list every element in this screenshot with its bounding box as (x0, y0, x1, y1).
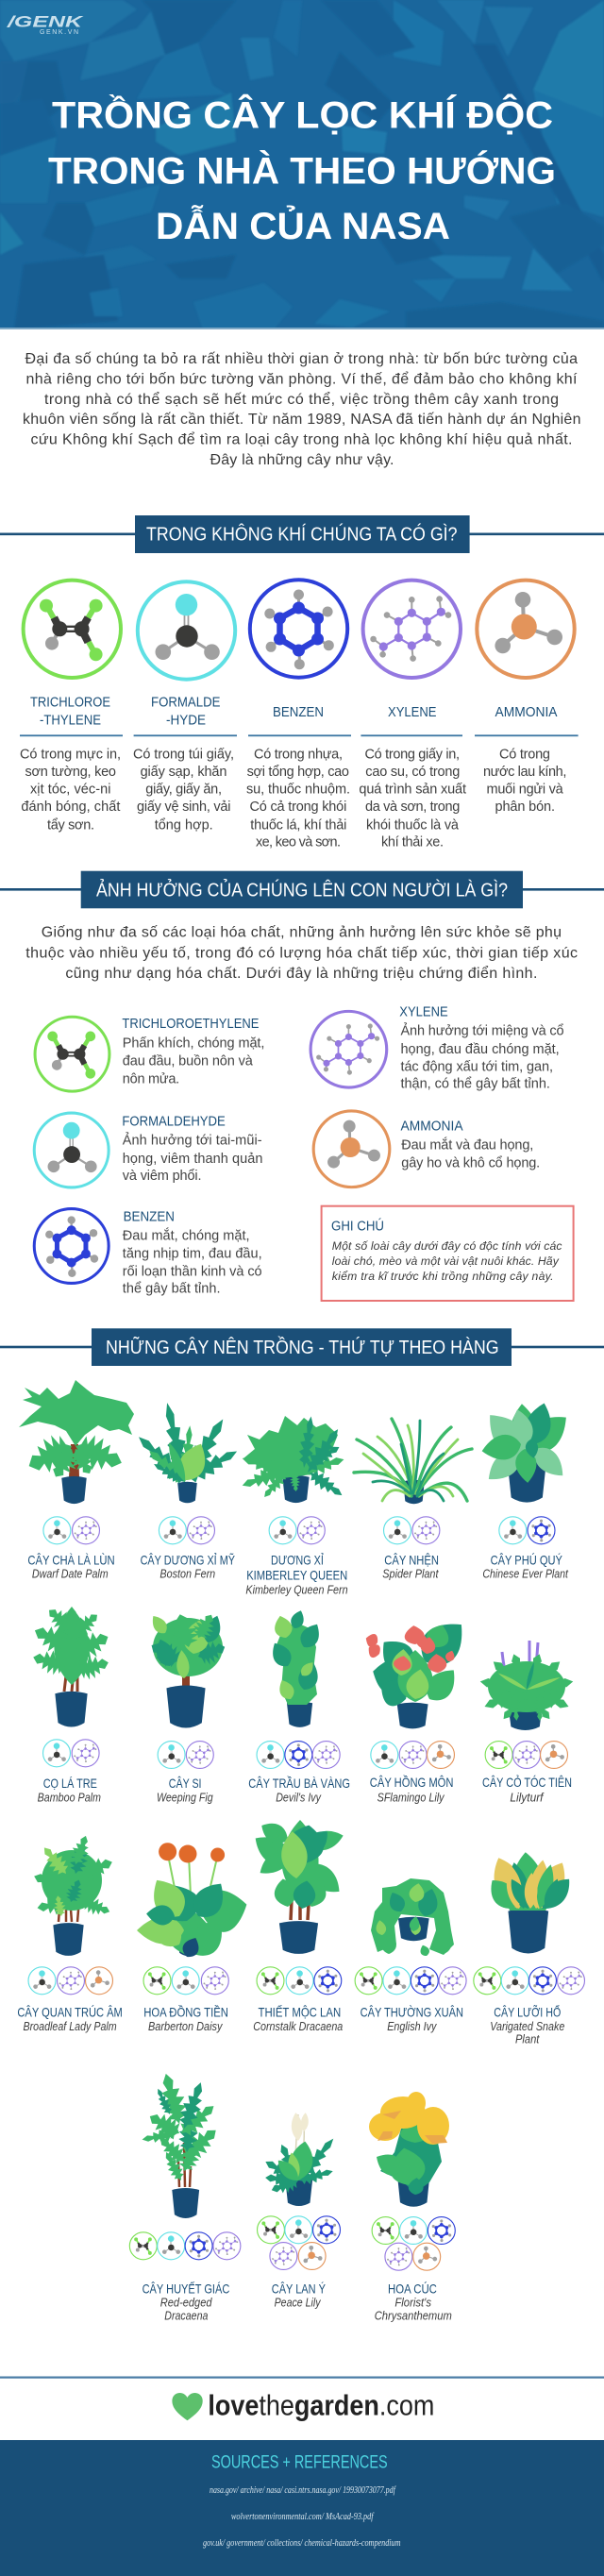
effects paragraph: thuộc vào nhiều yếu tố, trong đó có lượng hóa chất tiếp xúc, thời gian tiếp xúc (25, 946, 578, 962)
chemical: xylene: cao su, có trong (365, 765, 460, 780)
section heading: effects on humans (0, 871, 604, 908)
plant: Peace Lily: Peace Lily (275, 2296, 321, 2309)
plant: Bamboo Palm (29, 1602, 114, 1804)
plant: Broadleaf Lady Palm: Broadleaf Lady Palm (23, 2020, 117, 2033)
plant: English Ivy (355, 1878, 466, 2033)
foliage (261, 2113, 339, 2198)
plant: Boston Fern: CÂY DƯƠNG XỈ MỸ (141, 1553, 236, 1568)
plant: Dwarf Date Palm: CÂY CHÀ LÀ LÙN (27, 1553, 115, 1568)
callout: note: loài chó, mèo và một vài vật nuôi khác. Hãy (332, 1254, 560, 1268)
plant: Dwarf Date Palm (19, 1380, 134, 1581)
chemical: ammonia: nước lau kính, (483, 765, 566, 780)
chemical: trichloroethylene (20, 581, 123, 833)
foliage (30, 1833, 116, 1920)
plant: Broadleaf Lady Palm: CÂY QUAN TRÚC ÂM (17, 2005, 123, 2020)
plant: Kimberley Queen Fern (240, 1415, 348, 1597)
panel: five chemicals (20, 580, 579, 850)
chemical: xylene: Có trong giấy in, (364, 747, 460, 762)
footer: sources and references: SOURCES + REFERENCES (211, 2452, 388, 2472)
chemicals removed (43, 1740, 99, 1767)
effects paragraph (25, 925, 578, 982)
chemical: benzen: thuốc lá, khí thải (250, 817, 346, 833)
chemical: trichloroethylene: sơn tường, keo (25, 765, 116, 780)
plant: Red-edged Dracaena: Red-edged (160, 2296, 212, 2309)
chemicals removed (257, 1967, 342, 1995)
intro paragraph (23, 351, 581, 468)
symptom: trichloroethylene: Phấn khích, chóng mặt, (123, 1035, 264, 1051)
foliage (363, 1611, 475, 1711)
chemical: xylene (359, 581, 466, 850)
plant: Bamboo Palm: Bamboo Palm (38, 1791, 101, 1804)
chemical: benzen: sợi tổng hợp, cao (247, 765, 349, 780)
title: TRONG NHÀ THEO HƯỚNG (48, 149, 556, 193)
plant: Kimberley Queen Fern: Kimberley Queen Fern (245, 1584, 348, 1597)
foliage (371, 1878, 454, 1958)
chemical: formaldehyde: tổng hợp. (155, 817, 213, 833)
plant: Lilyturf (478, 1641, 575, 1804)
foliage (145, 1609, 229, 1679)
title: TRỒNG CÂY LỌC KHÍ ĐỘC (52, 93, 553, 137)
logo: GenK: GENK.VN (40, 29, 78, 36)
plant: Dwarf Date Palm: Dwarf Date Palm (32, 1568, 109, 1581)
chemical: trichloroethylene: TRICHLOROE (30, 695, 110, 710)
foliage (132, 1401, 242, 1489)
flowers (159, 1843, 225, 1863)
symptom: benzen: Đau mắt, chóng mặt, (123, 1228, 249, 1244)
plant: Boston Fern (132, 1401, 242, 1581)
section heading: effects on humans: ẢNH HƯỞNG CỦA CHÚNG LÊN CON NGƯỜI LÀ GÌ? (96, 878, 508, 901)
chemicals removed (158, 1742, 213, 1768)
title (48, 93, 556, 247)
plant: Red-edged Dracaena: Dracaena (164, 2309, 208, 2322)
plant: Snake Plant (474, 1851, 584, 2046)
symptom: formaldehyde: FORMALDEHYDE (122, 1114, 226, 1129)
section heading: in the air: TRONG KHÔNG KHÍ CHÚNG TA CÓ GÌ? (146, 524, 457, 546)
chemical: trichloroethylene: Có trong mực in, (20, 747, 121, 762)
chemicals removed (474, 1967, 584, 1995)
plant: Boston Fern: Boston Fern (159, 1568, 215, 1581)
symptom: trichloroethylene: TRICHLOROETHYLENE (122, 1017, 260, 1032)
symptom: benzen: tăng nhịp tim, đau đầu, (123, 1247, 262, 1262)
chemicals removed (485, 1742, 567, 1768)
plant: Snake Plant: Plant (515, 2032, 540, 2046)
plant: Kimberley Queen Fern: DƯƠNG XỈ (271, 1553, 324, 1568)
chemical: formaldehyde: giấy, giấy ăn, (145, 783, 222, 798)
symptom: trichloroethylene: nôn mửa. (123, 1071, 179, 1086)
symptom: formaldehyde: họng, viêm thanh quản (123, 1152, 262, 1167)
foliage (267, 1608, 325, 1705)
callout: note: Một số loài cây dưới đây có độc tính với các (332, 1239, 562, 1253)
plant: Spider Plant: CÂY NHỆN (384, 1553, 439, 1568)
plant: Spider Plant (354, 1419, 472, 1581)
logo: GenK (7, 13, 85, 36)
callout: note (322, 1206, 574, 1301)
logo: GenK: /GENK (7, 13, 85, 30)
foliage (354, 1419, 472, 1501)
effects paragraph: Giống như đa số các loại hóa chất, những ảnh hưởng lên sức khỏe sẽ phụ (42, 925, 562, 941)
effects paragraph: cũng như dạng hóa chất. Dưới đây là những triệu chứng điển hình. (65, 965, 537, 982)
chemicals removed (257, 1742, 340, 1768)
chemical: formaldehyde (133, 581, 237, 833)
plant: Devil's Ivy (248, 1608, 350, 1804)
symptom: ammonia: AMMONIA (400, 1119, 463, 1134)
plant: Flamingo Lily (363, 1611, 475, 1804)
symptom: benzen: thể gây bất tỉnh. (123, 1282, 221, 1297)
chemical: ammonia (475, 581, 579, 815)
chemicals removed (384, 1517, 440, 1544)
plant: Snake Plant: Varigated Snake (490, 2020, 564, 2033)
plant: Red-edged Dracaena: CÂY HUYẾT GIÁC (143, 2281, 229, 2296)
chemical: formaldehyde: giấy sạp, khăn (141, 765, 226, 780)
chemical: formaldehyde: giấy vệ sinh, vải (137, 800, 230, 815)
chemical: benzen (246, 580, 351, 850)
intro paragraph: nhà riêng cho tới bốn bức tường văn phòng. Ví thế, để đảm bảo cho không khí (26, 370, 578, 387)
symptom: ammonia (313, 1111, 540, 1187)
chemicals removed (355, 1967, 466, 1995)
callout: note: kiểm tra kĩ trước khi trồng những cây này. (332, 1270, 553, 1283)
symptom: trichloroethylene (35, 1017, 264, 1091)
footer: sources and references: gov.uk/ government/ collections/ chemical-hazards-compendium (203, 2537, 401, 2549)
symptom: trichloroethylene: đau đầu, buồn nôn và (123, 1054, 254, 1069)
plant: Devil's Ivy: CÂY TRẦU BÀ VÀNG (248, 1776, 350, 1791)
symptom: benzen (34, 1209, 262, 1297)
symptom: benzen: BENZEN (124, 1209, 175, 1224)
chemical: trichloroethylene: tẩy sơn. (47, 817, 94, 833)
plant: Florist's Chrysanthemum (369, 2092, 455, 2322)
foliage (240, 1415, 346, 1502)
chemical: xylene: khói thuốc là và (366, 817, 460, 833)
chemical: benzen: xe, keo và sơn. (256, 835, 341, 850)
chemical: formaldehyde: -HYDE (166, 713, 206, 728)
chemical: ammonia: AMMONIA (495, 705, 558, 720)
plant: Broadleaf Lady Palm (17, 1833, 123, 2033)
plant: Lilyturf: Lilyturf (510, 1791, 545, 1804)
foliage (19, 1380, 134, 1484)
plant: Chinese Ever Plant (478, 1400, 576, 1581)
chemicals removed (372, 2217, 455, 2270)
symptom: xylene: Ảnh hưởng tới miệng và cổ (400, 1023, 564, 1039)
foliage (483, 1851, 577, 1915)
plant: Flamingo Lily: SFlamingo Lily (378, 1791, 445, 1804)
symptom: formaldehyde: và viêm phổi. (123, 1169, 202, 1184)
plant: Spider Plant: Spider Plant (382, 1568, 439, 1581)
chemical: formaldehyde: Có trong túi giấy, (133, 747, 234, 762)
plant: Kimberley Queen Fern: KIMBERLEY QUEEN (246, 1568, 347, 1583)
chemical: trichloroethylene: đánh bóng, chất (21, 800, 120, 815)
intro paragraph: trong nhà có thể sạch sẽ hết mức có thể, việc trồng thêm cây xanh trong (44, 391, 559, 408)
plant: Florist's Chrysanthemum: Florist's (394, 2296, 431, 2309)
plant: Cornstalk Dracaena: THIẾT MỘC LAN (259, 2005, 341, 2020)
chemical: formaldehyde: FORMALDE (151, 695, 221, 710)
plant: Lilyturf: CÂY CỎ TÓC TIÊN (482, 1774, 572, 1790)
chemical: xylene: quá trình sản xuất (359, 783, 466, 798)
title: DẪN CỦA NASA (156, 204, 450, 247)
intro paragraph: khuôn viên sống là rất cần thiết. Từ năm 1989, NASA đã tiến hành dự án Nghiên (23, 412, 581, 428)
plant: Chinese Ever Plant: CÂY PHÚ QUÝ (491, 1553, 562, 1568)
chemical: benzen: Có cả trong khói (249, 800, 346, 815)
chemical: ammonia: phân bón. (495, 800, 555, 815)
footer: sources and references (0, 2440, 604, 2576)
footer: sources and references: nasa.gov/ archive/ nasa/ casi.ntrs.nasa.gov/ 19930073077.pdf (210, 2484, 396, 2496)
plant: Barberton Daisy: HOA ĐỒNG TIỀN (143, 2004, 228, 2020)
chemicals removed (28, 1967, 112, 1995)
symptom: formaldehyde: Ảnh hưởng tới tai-mũi- (123, 1133, 262, 1149)
footer logo: lovethegarden.com (0, 2377, 604, 2422)
plant: Flamingo Lily: CÂY HỒNG MÔN (370, 1774, 453, 1790)
plant: Cornstalk Dracaena: Cornstalk Dracaena (253, 2020, 343, 2033)
plant: Bamboo Palm: CỌ LÁ TRE (43, 1776, 97, 1791)
chemicals removed (129, 2232, 241, 2260)
section heading: plants: NHỮNG CÂY NÊN TRỒNG - THỨ TỰ THEO HÀNG (106, 1336, 499, 1358)
intro paragraph: Đây là những cây như vậy. (210, 452, 394, 468)
chemicals removed (499, 1517, 555, 1544)
symptom: formaldehyde (34, 1113, 262, 1187)
symptom: ammonia: gây ho và khô cổ họng. (401, 1156, 540, 1171)
section heading: plants (0, 1328, 604, 1366)
panel: symptoms (34, 1005, 574, 1301)
section heading: in the air (0, 515, 604, 553)
plant: Barberton Daisy: Barberton Daisy (148, 2020, 223, 2033)
symptom: xylene: XYLENE (399, 1005, 448, 1020)
foliage (137, 1843, 252, 1963)
chemicals removed (143, 1967, 228, 1995)
chemical: xylene: da và sơn, trong (365, 800, 460, 815)
symptom: xylene: họng, đau đầu chóng mặt, (400, 1042, 560, 1057)
chemical: benzen: su, thuốc nhuộm. (246, 783, 350, 798)
plant: Florist's Chrysanthemum: HOA CÚC (388, 2281, 437, 2296)
chemical: trichloroethylene: -THYLENE (40, 713, 101, 728)
plant: Peace Lily (258, 2113, 340, 2309)
plant: Weeping Fig: Weeping Fig (157, 1791, 213, 1804)
chemicals removed (159, 1517, 214, 1544)
header banner (0, 0, 604, 329)
plant: Red-edged Dracaena (129, 2071, 241, 2322)
foliage (478, 1400, 576, 1488)
plant: Snake Plant: CÂY LƯỠI HỔ (494, 2004, 561, 2020)
foliage (248, 1818, 346, 1911)
chemicals removed (269, 1517, 325, 1544)
chemical: ammonia: Có trong (499, 747, 550, 762)
chemical: benzen: BENZEN (273, 705, 324, 720)
chemicals removed (371, 1742, 454, 1768)
intro paragraph: Đại đa số chúng ta bỏ ra rất nhiều thời gian ở trong nhà: từ bốn bức tường của (25, 351, 578, 367)
foliage (29, 1602, 114, 1685)
plant: Devil's Ivy: Devil's Ivy (276, 1791, 322, 1804)
chemicals removed (43, 1517, 99, 1544)
plant: Chinese Ever Plant: Chinese Ever Plant (482, 1568, 568, 1581)
foliage (478, 1641, 575, 1725)
footer: sources and references: wolvertonenvironmental.com/ MsAcad-93.pdf (231, 2511, 375, 2522)
foliage (369, 2092, 449, 2196)
chemical: trichloroethylene: xịt tóc, véc-ni (30, 783, 111, 798)
symptom: ammonia: Đau mắt và đau họng, (401, 1136, 533, 1153)
plant: English Ivy: CÂY THƯỜNG XUÂN (361, 2005, 463, 2020)
plant: English Ivy: English Ivy (387, 2020, 437, 2033)
plant: Florist's Chrysanthemum: Chrysanthemum (375, 2309, 452, 2322)
plant: Cornstalk Dracaena (248, 1818, 346, 2033)
chemical: xylene: XYLENE (388, 705, 437, 720)
symptom: xylene: tác động xấu tới tim, gan, (400, 1060, 553, 1075)
plant: Peace Lily: CÂY LAN Ý (272, 2281, 326, 2296)
flowers (369, 2092, 449, 2145)
chemicals removed (258, 2216, 340, 2269)
symptom: xylene (310, 1005, 564, 1092)
chemical: xylene: khí thải xe. (381, 835, 444, 850)
intro paragraph: cứu Không khí Sạch để tìm ra loại cây trong nhà lọc không khí hiệu quả nhất. (30, 430, 572, 447)
callout: note: GHI CHÚ (331, 1218, 384, 1234)
plant: Weeping Fig: CÂY SI (169, 1776, 202, 1791)
plant: Weeping Fig (145, 1609, 229, 1804)
footer logo: lovethegarden.com: lovethegarden.com (208, 2389, 434, 2422)
chemical: benzen: Có trong nhựa, (254, 747, 343, 762)
symptom: xylene: thận, có thể gây bất tỉnh. (400, 1077, 550, 1092)
foliage (141, 2071, 224, 2183)
chemical: ammonia: muối ngửi và (487, 783, 564, 798)
symptom: benzen: rối loạn thần kinh và có (123, 1264, 262, 1279)
plant: Barberton Daisy (137, 1843, 252, 2033)
